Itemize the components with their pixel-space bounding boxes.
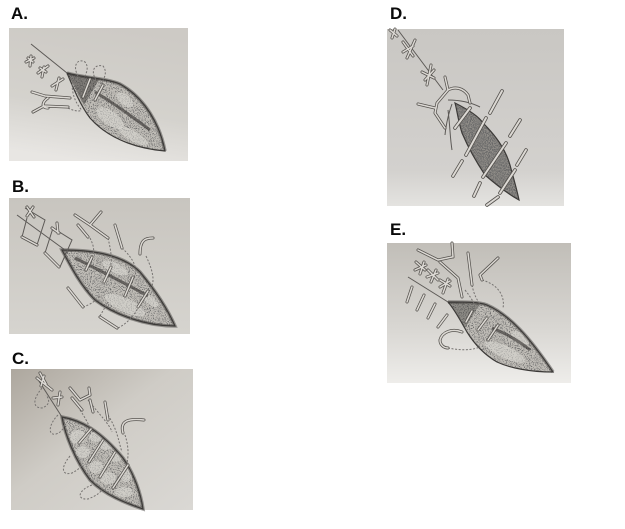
suture thread, knots and stitches D [390,29,526,205]
wound B [62,250,175,326]
panel: E suture illustration [387,243,571,383]
panel: B suture illustration [9,198,190,334]
suture thread and loops C [35,373,144,499]
label: D: D. [390,4,407,23]
panel: A suture illustration [9,28,188,161]
wound E [448,302,553,372]
wound A [67,73,165,151]
wound C [62,417,143,509]
suture thread and loops B [17,207,153,328]
wound D [455,103,519,200]
panel: C suture illustration [11,369,193,510]
suture thread and knots A [26,44,105,112]
suture thread, knots and stitches E [407,243,503,350]
label: E: E. [390,220,406,239]
label: B: B. [12,177,29,196]
label: A: A. [11,4,28,23]
panel: D suture illustration [387,29,564,206]
label: C: C. [12,349,29,368]
